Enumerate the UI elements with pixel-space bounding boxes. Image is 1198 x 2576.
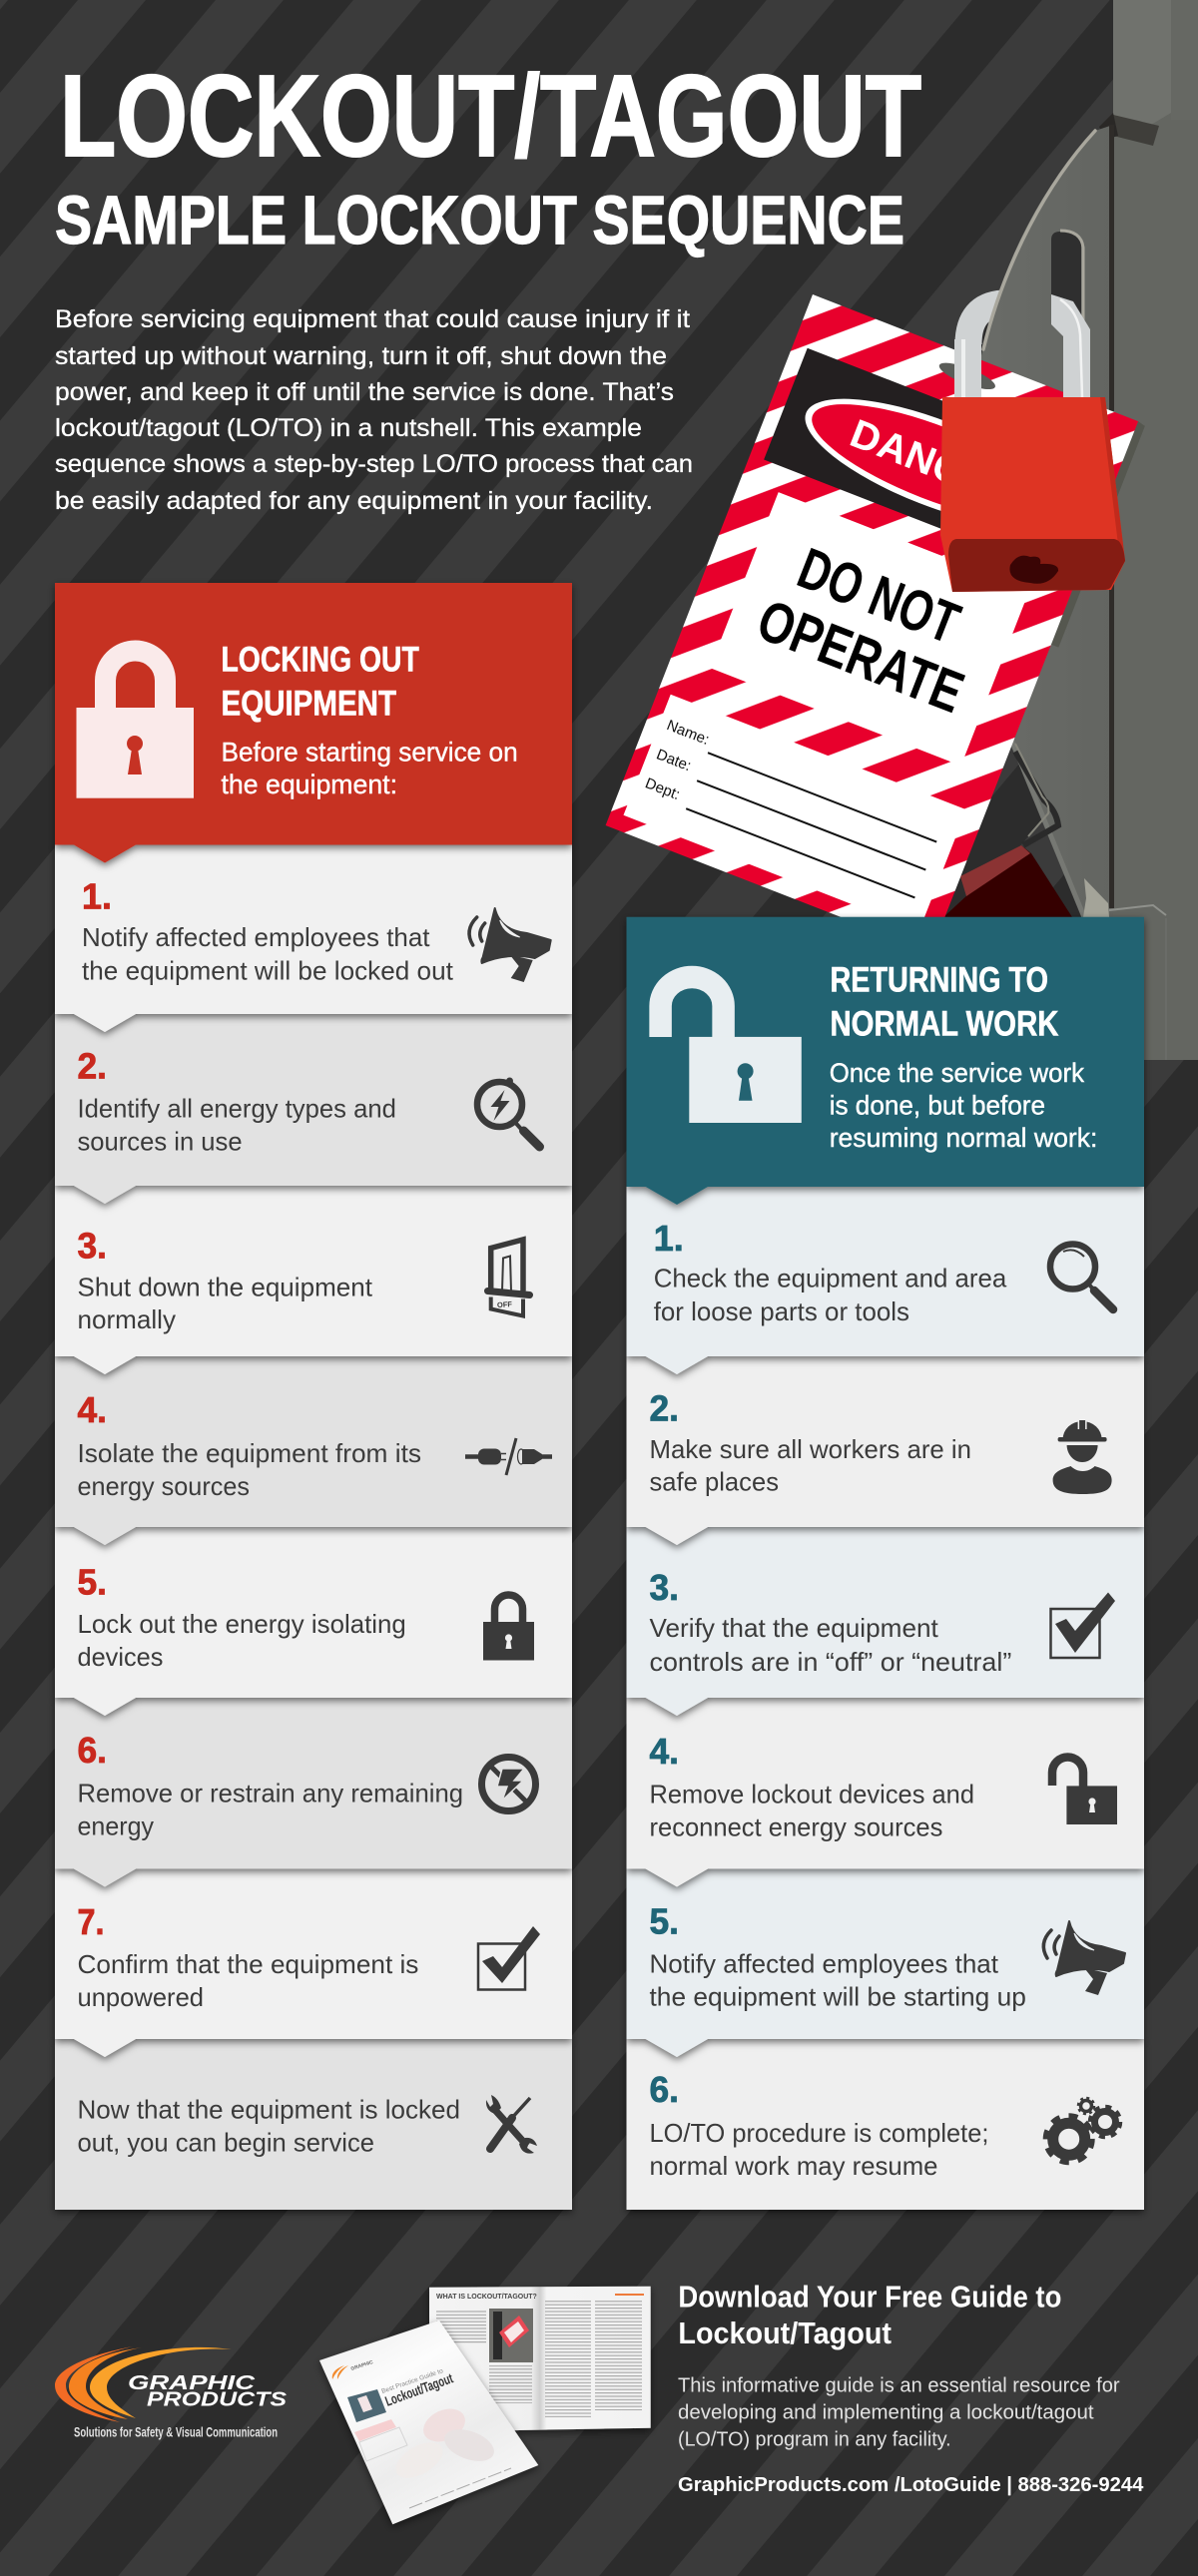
intro text — [55, 305, 693, 515]
download link and phone: GraphicProducts.com /LotoGuide | 888-326-9244 — [678, 2474, 1144, 2496]
download description — [678, 2375, 1120, 2451]
tag danger oval: DANGER — [845, 411, 1024, 516]
download heading: Lockout/Tagout — [678, 2317, 892, 2350]
returning description: resuming normal work: — [830, 1123, 1097, 1153]
illustration: hasp plate — [975, 125, 1166, 917]
icon: checkbox — [478, 1926, 540, 1990]
step 3: 3. — [649, 1567, 679, 1608]
step 6: normal work may resume — [649, 2151, 938, 2181]
download heading — [678, 2281, 1061, 2350]
tag heading — [749, 529, 995, 726]
tag danger header — [764, 348, 1105, 576]
brochure cover — [319, 2320, 538, 2524]
step 4: 4. — [78, 1389, 107, 1430]
step 1: 1. — [654, 1218, 684, 1259]
step 3: controls are in “off” or “neutral” — [649, 1647, 1011, 1677]
intro text: sequence shows a step-by-step LO/TO process that can — [55, 450, 693, 478]
illustration: shackle left behind plate — [968, 303, 1003, 344]
step 4: 4. — [649, 1731, 679, 1772]
icon: large open padlock — [661, 977, 802, 1123]
step 4: Remove lockout devices and — [649, 1780, 974, 1809]
step 2: 2. — [649, 1388, 679, 1429]
logo swooshes — [55, 2346, 232, 2422]
step 4: energy sources — [78, 1471, 250, 1501]
step 5: Notify affected employees that — [649, 1949, 999, 1979]
tag form lines: Dept: — [643, 774, 682, 803]
step 1: Check the equipment and area — [654, 1264, 1007, 1293]
download callout — [678, 2281, 1144, 2496]
icon: no energy — [481, 1757, 535, 1810]
download description: This informative guide is an essential resource for — [678, 2375, 1120, 2397]
icon: unplugged cord — [465, 1438, 552, 1475]
download description: (LO/TO) program in any facility. — [678, 2429, 951, 2451]
step 2: Make sure all workers are in — [649, 1434, 971, 1464]
final step: begin service: out, you can begin service — [78, 2128, 374, 2158]
locking out description: Before starting service on — [222, 737, 518, 767]
final step: begin service: Now that the equipment is locked — [78, 2095, 460, 2125]
step 3 — [627, 1527, 1144, 1716]
step 7: unpowered — [78, 1982, 204, 2012]
brochure inside spread — [429, 2287, 651, 2435]
download heading: Download Your Free Guide to — [678, 2281, 1061, 2315]
tag form lines — [641, 717, 943, 897]
step 6: 6. — [649, 2069, 679, 2110]
locking out heading: LOCKING OUT — [222, 641, 419, 680]
step 6 — [55, 1698, 572, 1886]
panel: returning to normal work — [627, 917, 1144, 2210]
step 6: LO/TO procedure is complete; — [649, 2118, 988, 2148]
step 6: Remove or restrain any remaining — [78, 1779, 463, 1808]
icon: disconnect switch: OFF — [497, 1299, 513, 1309]
tag hole — [936, 357, 998, 394]
step 5 — [55, 1527, 572, 1716]
step 3 — [55, 1186, 572, 1374]
step 5: the equipment will be starting up — [649, 1982, 1026, 2012]
returning heading: NORMAL WORK — [831, 1005, 1058, 1044]
illustration: red padlock — [940, 397, 1125, 592]
step 7 — [55, 1868, 572, 2057]
step 1: the equipment will be locked out — [82, 956, 454, 986]
icon: magnifier — [1050, 1244, 1113, 1309]
icon: magnifier with energy bolt — [477, 1078, 539, 1147]
tag form lines: Name: — [664, 717, 712, 749]
step 5: 5. — [649, 1901, 679, 1942]
brochure cover: GRAPHIC — [350, 2359, 374, 2372]
brochure: guide to lockout/tagout — [319, 2287, 651, 2524]
tag heading: OPERATE — [749, 587, 972, 726]
title: LOCKOUT/TAGOUT — [60, 51, 921, 181]
locking out header — [55, 583, 572, 862]
step 4: Isolate the equipment from its — [78, 1438, 421, 1468]
step 1: for loose parts or tools — [654, 1296, 909, 1326]
logo wordmark: PRODUCTS — [147, 2389, 288, 2411]
locking out description — [222, 737, 518, 799]
step 2 — [627, 1356, 1144, 1545]
illustration: maroon padlock tag behind — [943, 845, 1072, 917]
step 4: reconnect energy sources — [649, 1812, 942, 1842]
step 1: Notify affected employees that — [82, 922, 430, 952]
icon: gears — [1046, 2098, 1120, 2162]
step 5 — [627, 1868, 1144, 2057]
returning description: Once the service work — [830, 1058, 1084, 1088]
icon: checkbox — [1050, 1593, 1115, 1658]
illustration: machine cabinet — [1099, 0, 1198, 1060]
step 7: 7. — [78, 1901, 104, 1942]
brochure inside spread: WHAT IS LOCKOUT/TAGOUT? — [436, 2294, 537, 2301]
step 2: sources in use — [78, 1127, 243, 1157]
locking out heading: EQUIPMENT — [222, 685, 396, 724]
step 3: Verify that the equipment — [649, 1613, 939, 1643]
intro text: be easily adapted for any equipment in your facility. — [55, 487, 653, 515]
illustration: shackle front — [954, 294, 1090, 399]
step 1 — [627, 1187, 1144, 1374]
locking out heading — [222, 641, 419, 724]
locking out description: the equipment: — [222, 770, 397, 799]
icon: megaphone — [1043, 1921, 1125, 1995]
intro text: started up without warning, turn it off, shut down the — [55, 342, 667, 370]
step 2 — [55, 1014, 572, 1204]
panel: locking out equipment — [55, 583, 572, 2210]
final step: begin service — [55, 2039, 572, 2210]
brochure cover: Best Practice Guide to — [380, 2367, 444, 2395]
icon: disconnect switch — [487, 1240, 529, 1315]
subtitle: SAMPLE LOCKOUT SEQUENCE — [55, 182, 904, 258]
returning description: is done, but before — [830, 1090, 1045, 1120]
step 4 — [55, 1356, 572, 1545]
step 3: 3. — [78, 1226, 107, 1266]
step 2: 2. — [78, 1046, 107, 1087]
step 5: devices — [78, 1642, 163, 1672]
logo: graphic products — [55, 2346, 288, 2440]
logo wordmark: GRAPHIC — [128, 2372, 256, 2394]
returning heading — [831, 961, 1058, 1044]
step 5: 5. — [78, 1562, 107, 1603]
step 1: 1. — [82, 875, 112, 916]
step 2: Identify all energy types and — [78, 1093, 396, 1123]
logo wordmark — [128, 2372, 288, 2411]
step 2: safe places — [649, 1467, 779, 1497]
returning header — [627, 917, 1144, 1205]
step 4 — [627, 1698, 1144, 1886]
tag form lines: Date: — [654, 746, 694, 774]
icon: open padlock — [1052, 1757, 1117, 1824]
step 7: Confirm that the equipment is — [78, 1949, 418, 1979]
step 6 — [627, 2039, 1144, 2210]
icon: padlock — [483, 1595, 534, 1661]
logo tagline: Solutions for Safety & Visual Communication — [74, 2425, 278, 2440]
step 3: normally — [78, 1304, 176, 1334]
brochure cover: Lockout/Tagout — [383, 2369, 455, 2409]
icon: large closed padlock — [76, 651, 194, 798]
step 3: Shut down the equipment — [78, 1272, 373, 1301]
returning heading: RETURNING TO — [831, 961, 1048, 1000]
intro text: Before servicing equipment that could cause injury if it — [55, 305, 690, 333]
step 6: energy — [78, 1810, 154, 1840]
step 1 — [55, 844, 572, 1032]
icon: wrench and screwdriver — [486, 2095, 537, 2154]
tag danger oval — [791, 373, 1078, 553]
icon: megaphone — [469, 908, 551, 982]
intro text: lockout/tagout (LO/TO) in a nutshell. This example — [55, 414, 642, 442]
icon: worker with hard hat — [1053, 1420, 1112, 1494]
illustration: danger tag — [606, 294, 1146, 955]
step 6: 6. — [78, 1730, 107, 1771]
tag heading: DO NOT — [790, 536, 968, 657]
step 5: Lock out the energy isolating — [78, 1609, 406, 1639]
intro text: power, and keep it off until the service is done. That’s — [55, 378, 674, 406]
download description: developing and implementing a lockout/tagout — [678, 2401, 1094, 2423]
returning description — [830, 1058, 1097, 1153]
